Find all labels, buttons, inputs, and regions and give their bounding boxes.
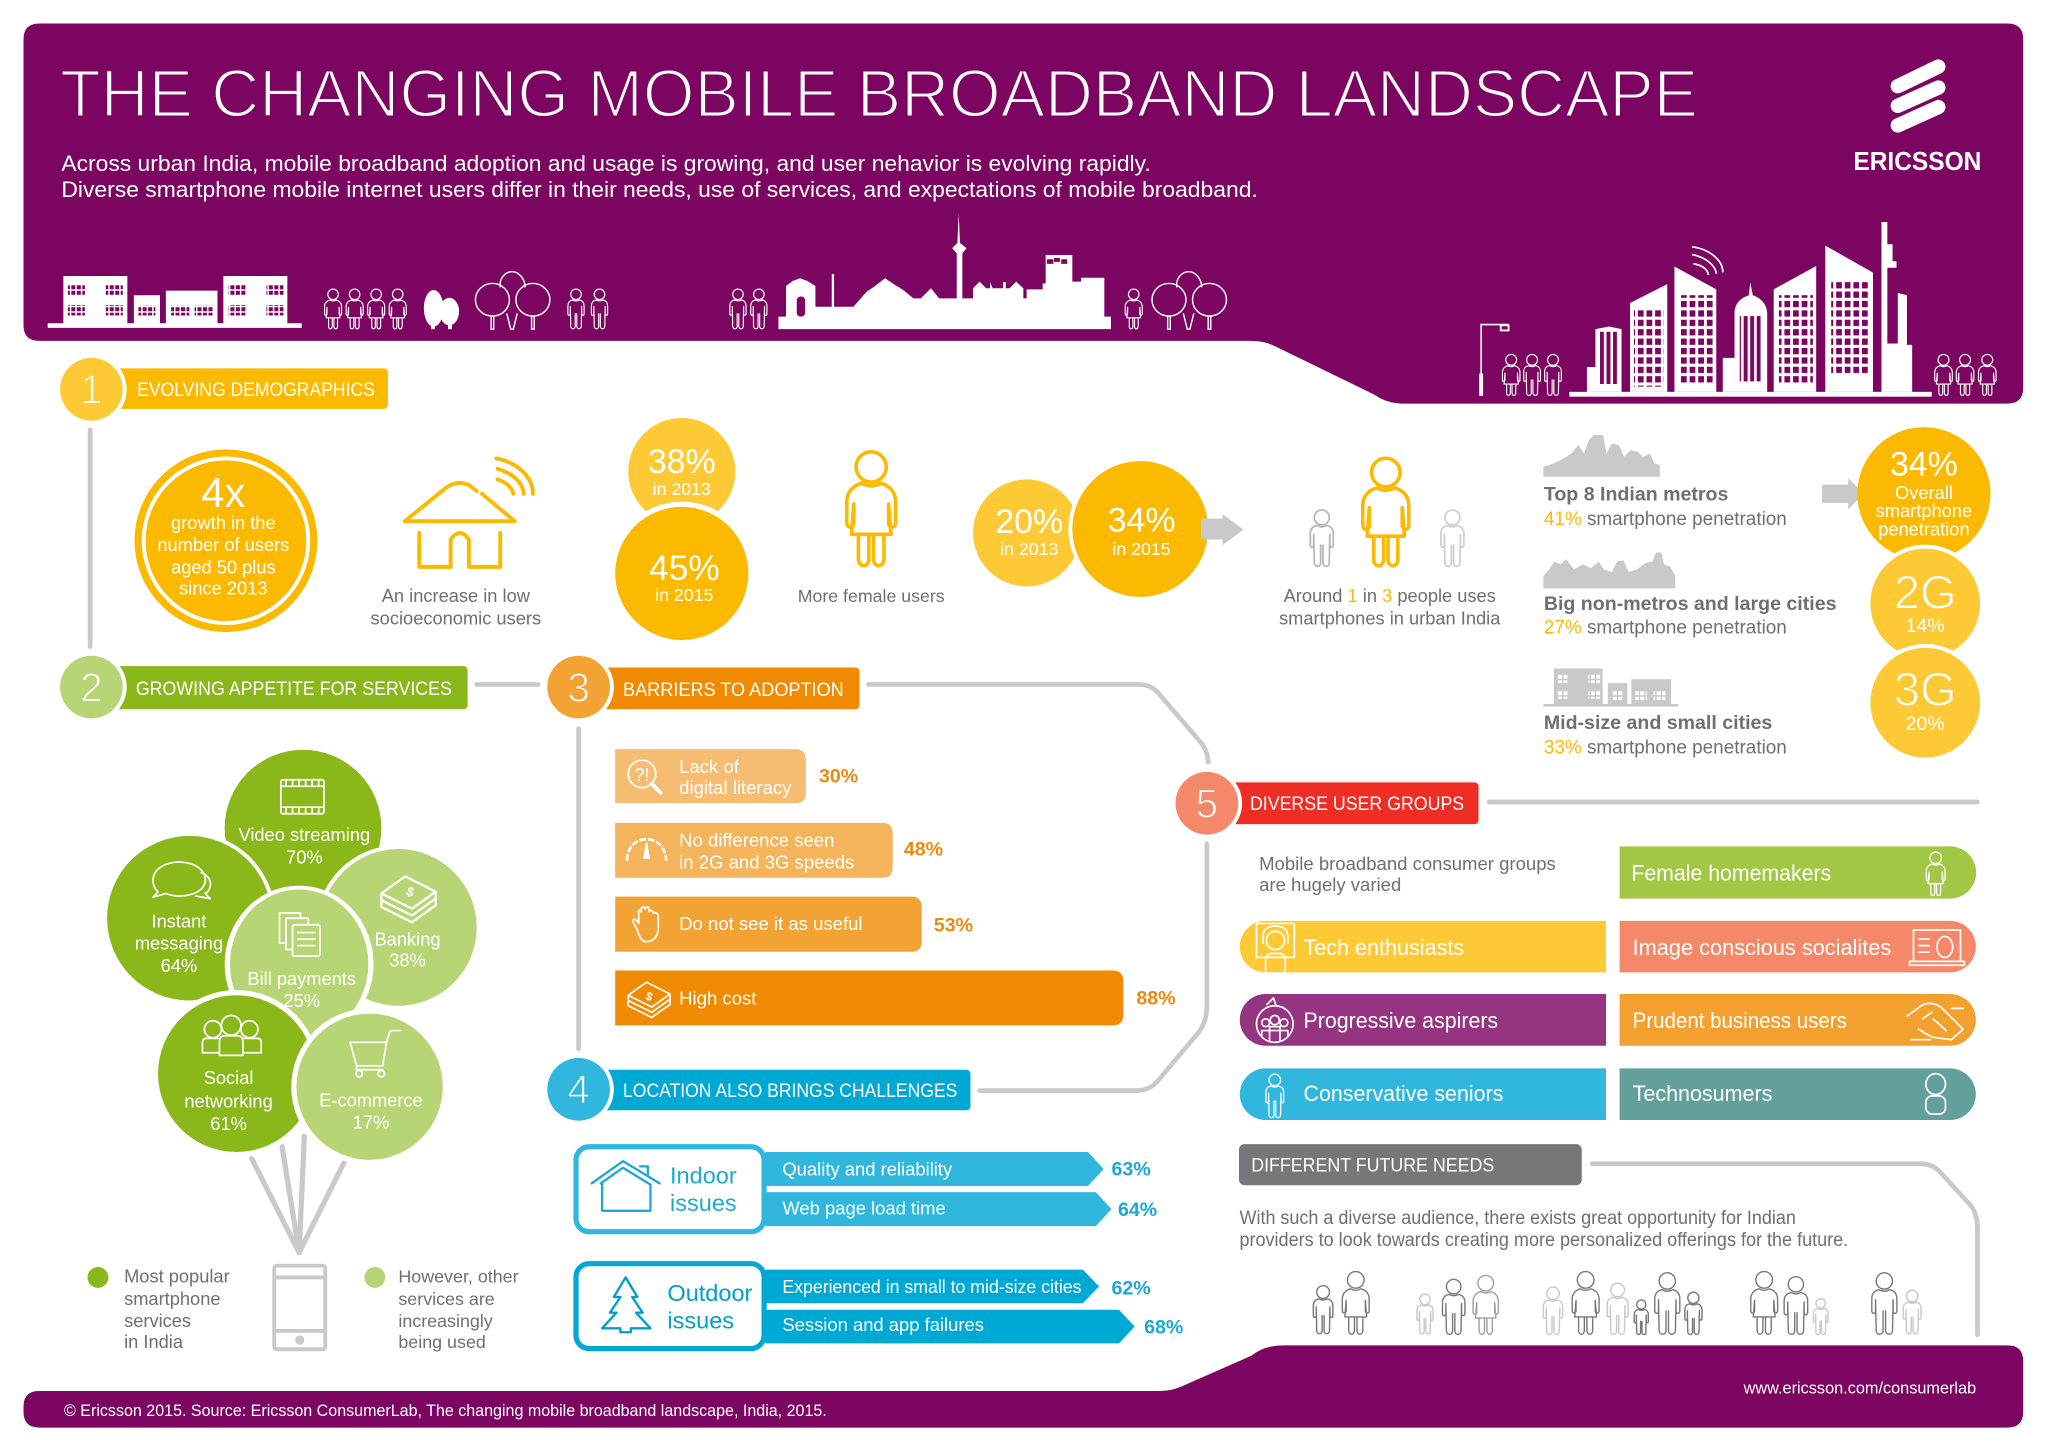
bar: digital literacy 30%: 30%: [819, 765, 858, 787]
panel: indoor issues: Web page load time: [782, 1198, 946, 1219]
text: future opportunity: [1240, 1208, 1848, 1251]
stat: overall penetration, 2G and 3G: 2G: [1894, 566, 1957, 619]
footer url: www.ericsson.com/consumerlab: [1743, 1379, 1976, 1398]
icon: small town skyline: [48, 276, 302, 328]
bar: digital literacy 30%: [615, 749, 858, 803]
legend: most popular: [88, 1266, 230, 1352]
panel: outdoor issues: 62%: [1112, 1277, 1151, 1299]
text: mid-size cities: 33% smartphone penetration: [1544, 738, 1787, 759]
stat: 38% to 45% female: 45%: [649, 549, 720, 588]
icon: large city skyline: [1543, 553, 1675, 588]
icon: outline trees right: [1152, 272, 1226, 329]
section 4 heading: LOCATION ALSO BRINGS CHALLENGES: [623, 1081, 957, 1102]
legend: other services: However, other: [398, 1267, 519, 1287]
pill: conservative seniors: [1240, 1068, 1606, 1120]
icon: outline trees: [475, 272, 550, 329]
balloon chart: smartphone services: [103, 750, 481, 1253]
balloon strings: [252, 1136, 344, 1253]
stat: overall penetration, 2G and 3G: smartphone: [1876, 500, 1972, 521]
panel: indoor issues: 63%: [1112, 1159, 1151, 1181]
text: consumer groups: [1259, 853, 1556, 895]
footer band: [24, 1345, 2023, 1428]
section 3 heading: 3: [567, 664, 590, 710]
text: top 8 metros: [1544, 483, 1787, 530]
stat: 4x growth circle: number of users: [157, 534, 289, 555]
panel: outdoor issues: Session and app failures: [782, 1314, 984, 1335]
icon: street lamp: [1481, 325, 1509, 396]
intro text: Across urban India, mobile broadband adoption and usage is growing, and user nehavior is evolving rapidly.: [61, 151, 1151, 176]
bar: no difference 48%: No difference seen: [679, 829, 834, 850]
stat: overall penetration, 2G and 3G: Overall: [1895, 482, 1953, 503]
icon: three people right: [1935, 354, 1996, 395]
stat: 20% to 34% users: 20%: [995, 503, 1063, 541]
stat: 20% to 34% users: in 2013: [1000, 539, 1058, 559]
panel: indoor issues: Indoor: [670, 1162, 737, 1188]
text: consumer groups: are hugely varied: [1259, 874, 1401, 895]
balloon: social networking: Social: [204, 1067, 253, 1088]
balloon: bill payments: [225, 886, 374, 1042]
icon: house with wifi: [405, 458, 533, 567]
caption: low socioeconomic users: [371, 585, 541, 628]
balloon: social networking: networking: [184, 1091, 273, 1112]
bar: digital literacy 30%: ?!: [634, 764, 650, 785]
section 5 heading: [1172, 768, 1479, 839]
panel: outdoor issues: Outdoor: [667, 1280, 753, 1306]
stat: overall penetration, 2G and 3G: 34%: [1890, 445, 1958, 483]
section 2 heading: GROWING APPETITE FOR SERVICES: [136, 679, 452, 700]
stat: 4x growth circle: 4x: [201, 469, 246, 516]
stat: overall penetration, 2G and 3G: penetration: [1878, 519, 1970, 540]
bar: not useful 53%: [615, 897, 973, 952]
intro text: Diverse smartphone mobile internet users differ in their needs, use of services, and expectations of mobile broadband.: [61, 177, 1258, 202]
section 1 heading: EVOLVING DEMOGRAPHICS: [137, 380, 375, 401]
balloon: e-commerce: 17%: [353, 1112, 389, 1133]
icon: three people by lamp: [1502, 354, 1561, 395]
panel: indoor issues: [576, 1147, 1157, 1232]
pill: female homemakers: [1620, 846, 1976, 899]
legend: most popular: smartphone: [124, 1288, 221, 1309]
legend: most popular: services: [124, 1310, 191, 1331]
legend: most popular: Most popular: [124, 1266, 230, 1287]
section 2 heading: [56, 652, 468, 722]
text: consumer groups: Mobile broadband consumer groups: [1259, 853, 1556, 874]
legend: other services: [364, 1267, 519, 1352]
text: top 8 metros: 41% smartphone penetration: [1544, 509, 1787, 530]
balloon: banking: $: [404, 883, 417, 900]
legend: other services: services are: [398, 1289, 495, 1309]
icon: people group: [325, 289, 406, 329]
text: future opportunity: providers to look towards creating more personalized offerings for the future.: [1240, 1230, 1848, 1251]
icon: families: [1313, 1272, 1921, 1335]
pill: conservative seniors: Conservative seniors: [1304, 1081, 1503, 1106]
icon: one in three people: [1310, 458, 1464, 566]
connector lines: [90, 430, 1977, 1335]
section 3 heading: [543, 652, 859, 722]
stat: overall penetration, 2G and 3G: 14%: [1906, 615, 1945, 637]
pill: technosumers: Technosumers: [1633, 1081, 1772, 1106]
stat: 20% to 34% users: in 2015: [1112, 539, 1171, 559]
bar: not useful 53%: Do not see it as useful: [679, 913, 863, 934]
icon: modern city skyline: [1569, 222, 1932, 397]
pill: prudent business users: Prudent business users: [1633, 1008, 1847, 1033]
balloon: social networking: 61%: [210, 1113, 247, 1134]
panel: outdoor issues: 68%: [1144, 1317, 1183, 1339]
icon: person: [1125, 289, 1142, 329]
stat: overall penetration, 2G and 3G: 3G: [1894, 662, 1957, 715]
panel: indoor issues: 64%: [1118, 1199, 1157, 1221]
stat: 38% to 45% female: in 2013: [653, 479, 711, 499]
text: mid-size cities: [1544, 712, 1787, 759]
balloon: banking: 38%: [389, 950, 426, 971]
stat: 20% to 34% users: 34%: [1108, 502, 1176, 540]
icon: Delhi monuments skyline: [778, 213, 1111, 329]
section 3 heading: BARRIERS TO ADOPTION: [623, 680, 844, 701]
balloon: banking: [316, 845, 481, 1010]
balloon: video streaming: 70%: [286, 846, 323, 867]
pill: female homemakers: Female homemakers: [1631, 860, 1831, 885]
balloon: e-commerce: E-commerce: [319, 1089, 423, 1110]
section heading: different future needs: DIFFERENT FUTURE NEEDS: [1251, 1156, 1494, 1177]
bar: no difference 48%: [615, 823, 943, 878]
pill: tech enthusiasts: [1240, 921, 1606, 973]
balloon: banking: Banking: [375, 929, 441, 950]
balloon: bill payments: 25%: [283, 990, 320, 1011]
panel: outdoor issues: issues: [667, 1307, 734, 1333]
stat: 20% to 34% users: [973, 457, 1212, 601]
icon: Ericsson logo: [1898, 67, 1938, 125]
section 5 heading: DIVERSE USER GROUPS: [1250, 794, 1464, 815]
legend: other services: being used: [398, 1332, 486, 1352]
icon: two people: [568, 289, 608, 329]
caption: more female users: More female users: [798, 586, 945, 606]
balloon: instant messaging: 64%: [161, 955, 197, 976]
panel: outdoor issues: [576, 1264, 1183, 1349]
balloon: instant messaging: [103, 832, 276, 1004]
icon: small city buildings: [1543, 668, 1678, 707]
footer source: © Ericsson 2015. Source: Ericsson ConsumerLab, The changing mobile broadband landscape, India, 2015.: [64, 1402, 827, 1420]
section 1 heading: 1: [80, 367, 103, 413]
caption: low socioeconomic users: An increase in low: [382, 585, 531, 606]
arrow: [1201, 514, 1243, 545]
caption: low socioeconomic users: socioeconomic users: [371, 607, 541, 628]
balloon: video streaming: Video streaming: [238, 824, 370, 845]
pill: image conscious socialites: [1620, 921, 1976, 972]
legend: other services: increasingly: [398, 1311, 493, 1331]
caption: 1 in 3 people: Around 1 in 3 people uses: [1284, 585, 1496, 606]
text: big non-metros: 27% smartphone penetration: [1544, 617, 1787, 638]
header banner: [24, 24, 2023, 404]
section 1 heading: [56, 354, 388, 425]
section 5 heading: 5: [1196, 781, 1218, 827]
stat: 4x growth circle: aged 50 plus: [171, 556, 276, 577]
bar: digital literacy 30%: Lack of: [679, 756, 740, 777]
balloon: social networking: [153, 990, 320, 1157]
bar: no difference 48%: in 2G and 3G speeds: [679, 852, 854, 873]
bar: not useful 53%: 53%: [934, 914, 973, 936]
section 2 heading: 2: [80, 664, 103, 710]
balloon: e-commerce: [291, 1008, 448, 1165]
pill: image conscious socialites: Image conscious socialites: [1633, 935, 1891, 960]
bar: high cost 88%: 88%: [1136, 987, 1176, 1009]
logo wordmark: ERICSSON: [1853, 148, 1981, 176]
text: mid-size cities: Mid-size and small cities: [1544, 712, 1772, 734]
pill: technosumers: [1620, 1068, 1976, 1120]
bar: high cost 88%: High cost: [679, 987, 757, 1008]
stat: 38% to 45% female: 38%: [648, 443, 716, 481]
text: future opportunity: With such a diverse audience, there exists great opportunity for Indian: [1240, 1208, 1796, 1229]
bar: digital literacy 30%: digital literacy: [679, 777, 792, 798]
pill: prudent business users: [1620, 994, 1976, 1046]
stat: 4x growth circle: growth in the: [171, 512, 276, 533]
title: THE CHANGING MOBILE BROADBAND LANDSCAPE: [60, 57, 1698, 131]
icon: wifi on building: [1693, 247, 1723, 274]
text: top 8 metros: Top 8 Indian metros: [1544, 483, 1729, 505]
panel: indoor issues: issues: [670, 1190, 737, 1216]
stat: overall penetration, 2G and 3G: [1857, 427, 1991, 761]
section heading: different future needs: [1239, 1144, 1582, 1185]
section 4 heading: [543, 1054, 970, 1125]
panel: outdoor issues: Experienced in small to mid-size cities: [782, 1276, 1081, 1297]
balloon: bill payments: Bill payments: [247, 968, 356, 989]
balloon: instant messaging: messaging: [135, 933, 223, 954]
balloon: instant messaging: Instant: [152, 910, 206, 931]
pill: progressive aspirers: Progressive aspirers: [1304, 1008, 1498, 1033]
icon: two people: [730, 289, 767, 329]
bar: no difference 48%: 48%: [904, 839, 943, 861]
text: big non-metros: [1544, 593, 1837, 638]
balloon: video streaming: [225, 750, 381, 906]
stat: overall penetration, 2G and 3G: 20%: [1906, 713, 1945, 735]
bar chart: barriers to adoption: [615, 749, 1176, 1025]
stat: 38% to 45% female: [610, 418, 754, 645]
section 4 heading: 4: [567, 1067, 590, 1113]
bar: high cost 88%: [615, 970, 1176, 1025]
icon: solid trees: [424, 290, 459, 329]
text: big non-metros: Big non-metros and large cities: [1544, 593, 1837, 615]
caption: 1 in 3 people: smartphones in urban India: [1279, 607, 1501, 628]
arrow: [1822, 478, 1864, 509]
stat: 4x growth circle: [135, 449, 317, 632]
stat: 4x growth circle: since 2013: [179, 577, 268, 598]
icon: metro skyline: [1543, 435, 1660, 477]
intro text: [61, 151, 1258, 202]
pill: tech enthusiasts: Tech enthusiasts: [1304, 935, 1464, 960]
stat: 38% to 45% female: in 2015: [655, 585, 714, 605]
icon: smartphone: [274, 1266, 325, 1349]
legend: most popular: in India: [124, 1331, 184, 1352]
icon: female user: [847, 452, 896, 566]
caption: 1 in 3 people: [1279, 585, 1501, 628]
bar: high cost 88%: $: [644, 990, 655, 1004]
panel: indoor issues: Quality and reliability: [782, 1159, 953, 1180]
pill: progressive aspirers: [1240, 994, 1606, 1046]
